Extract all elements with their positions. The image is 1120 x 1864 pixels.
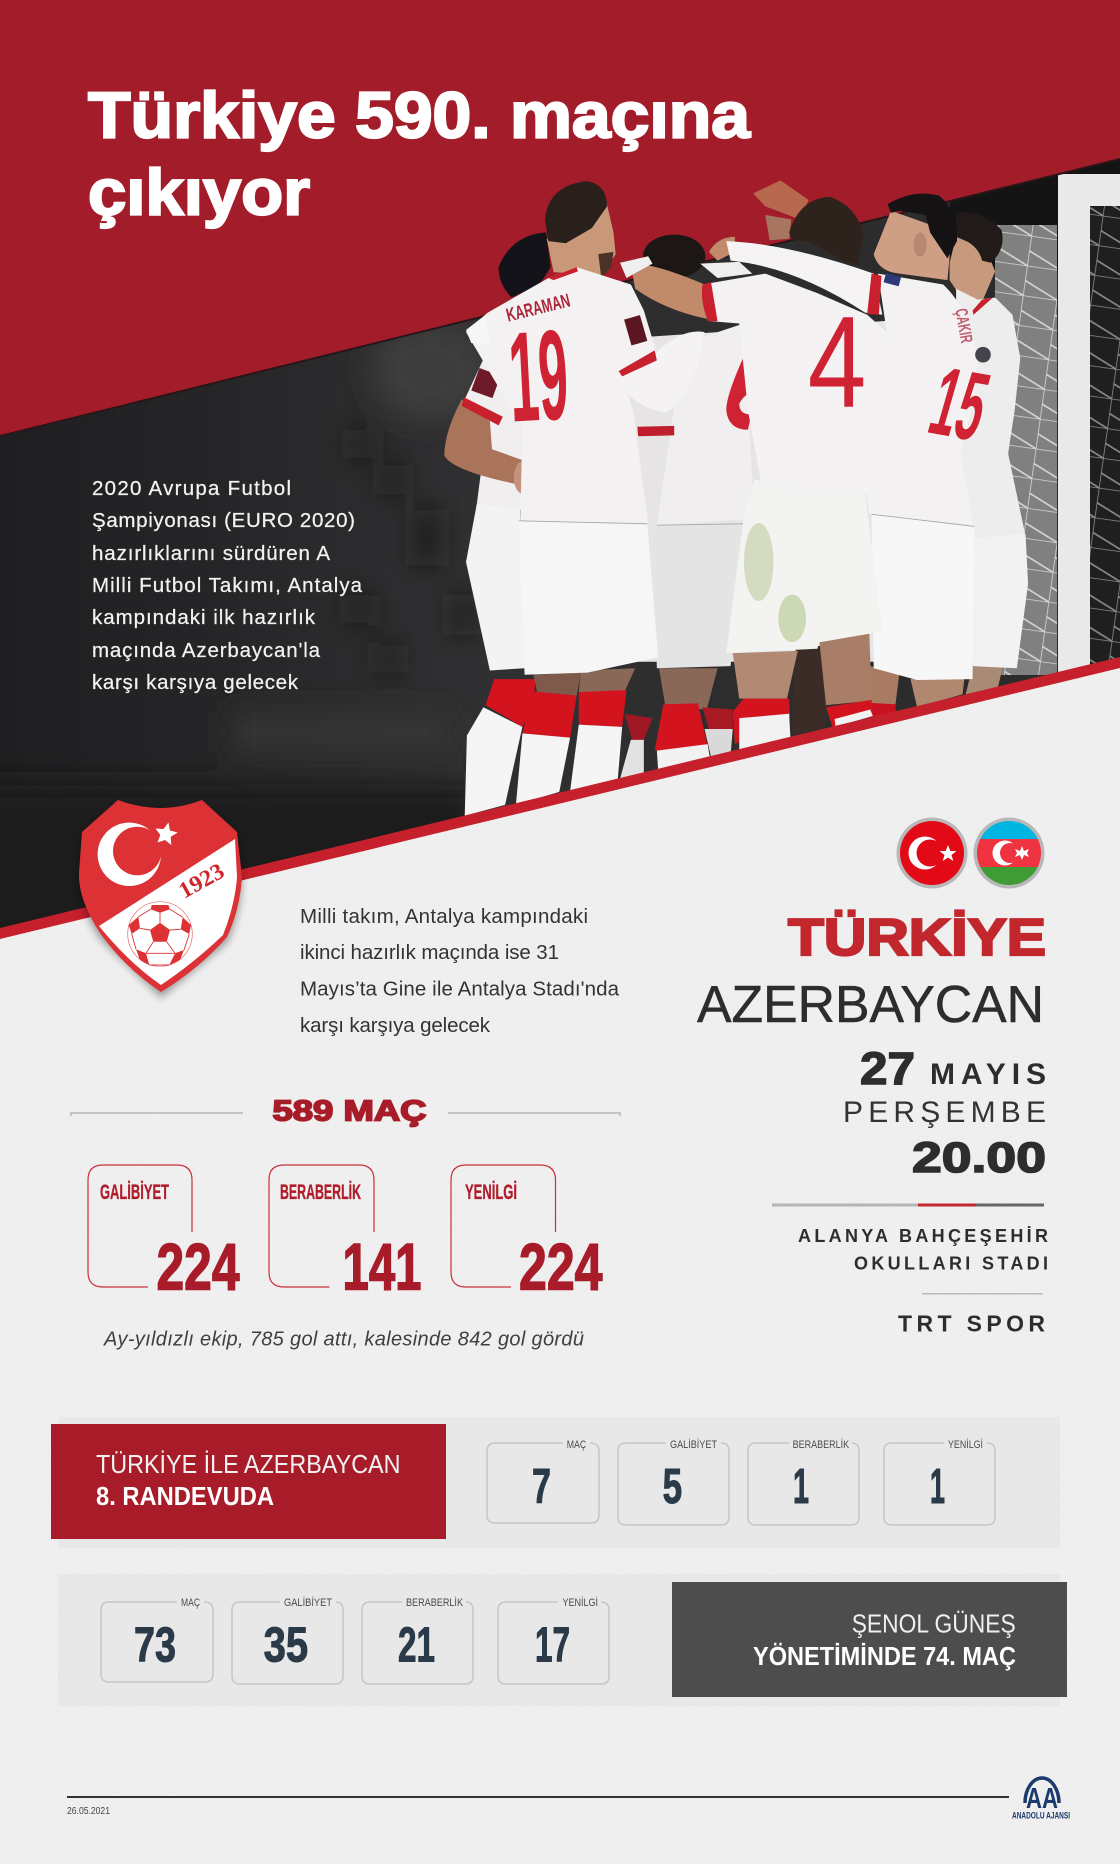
paper texture xyxy=(7,668,1119,938)
red diagonal band and light lower panel xyxy=(0,657,1120,1864)
stat: yenilgi: 224 xyxy=(519,1230,603,1304)
stat numbers: 73 xyxy=(134,1618,176,1672)
stat: yenilgi: YENİLGİ xyxy=(465,1181,517,1204)
player 19: 19 xyxy=(506,304,571,449)
stat labels: GALİBİYET xyxy=(284,1596,332,1609)
stat: galibiyet: GALİBİYET xyxy=(100,1181,169,1204)
title: Türkiye 590. maçına xyxy=(88,78,751,152)
player 15 head and arm xyxy=(726,194,957,315)
stat numbers xyxy=(532,1460,945,1514)
player left xyxy=(444,232,551,816)
title: çıkıyor xyxy=(88,156,310,228)
logo: Anadolu Ajansı: ANADOLU AJANSI xyxy=(1012,1810,1070,1822)
panel: Türkiye - Azerbaycan head to head xyxy=(51,1417,1060,1548)
top red panel xyxy=(0,0,1120,436)
stat: beraberlik: 141 xyxy=(342,1230,422,1304)
intro text: maçında Azerbaycan'la xyxy=(92,639,321,662)
match details: TÜRKİYE xyxy=(788,909,1046,967)
player centre back xyxy=(620,235,869,779)
intro text: Şampiyonası (EURO 2020) xyxy=(92,509,355,532)
player 4: 4 xyxy=(808,289,866,435)
match details: MAYIS xyxy=(930,1058,1046,1091)
logo: Anadolu Ajansı xyxy=(1012,1778,1070,1822)
intro text: karşı karşıya gelecek xyxy=(92,671,299,694)
intro text: hazırlıklarını sürdüren A xyxy=(92,542,330,565)
stat labels: GALİBİYET xyxy=(670,1438,717,1451)
stat numbers: 17 xyxy=(535,1618,570,1672)
match details: TRT SPOR xyxy=(898,1310,1045,1336)
stat boxes xyxy=(101,1602,609,1684)
football in crest xyxy=(128,902,192,966)
callout: 8. randevuda xyxy=(51,1424,446,1539)
goal post and net xyxy=(995,174,1120,675)
goals note: Ay-yıldızlı ekip, 785 gol attı, kalesinde 842 gol gördü xyxy=(103,1328,584,1350)
callout: Şenol Güneş: ŞENOL GÜNEŞ xyxy=(852,1608,1016,1638)
second paragraph: ikinci hazırlık maçında ise 31 xyxy=(300,941,559,964)
callout: Şenol Güneş xyxy=(672,1582,1067,1697)
stat labels: MAÇ xyxy=(567,1439,586,1451)
stat labels: BERABERLİK xyxy=(793,1438,850,1451)
player 15 body xyxy=(865,274,1000,719)
callout: Şenol Güneş: YÖNETİMİNDE 74. MAÇ xyxy=(753,1641,1016,1671)
logo: Anadolu Ajansı: AA xyxy=(1026,1783,1058,1815)
intro text: Milli Futbol Takımı, Antalya xyxy=(92,574,363,597)
stat numbers: 21 xyxy=(398,1618,435,1672)
flags xyxy=(896,818,1044,888)
second paragraph: Mayıs’ta Gine ile Antalya Stadı'nda xyxy=(300,978,620,1000)
callout: 8. randevuda: 8. RANDEVUDA xyxy=(96,1481,274,1511)
stat numbers: 1 xyxy=(793,1460,809,1514)
crest: Turkish Football Federation xyxy=(79,800,242,998)
second paragraph: karşı karşıya gelecek xyxy=(300,1014,491,1037)
match details xyxy=(697,909,1048,1336)
player 19 xyxy=(466,181,705,805)
flag: Turkey xyxy=(896,818,968,888)
player 15 body: ÇAKIR xyxy=(951,307,977,345)
panel: Şenol Güneş record xyxy=(58,1574,1067,1706)
stat: galibiyet: 224 xyxy=(156,1230,240,1304)
flag: Azerbaijan xyxy=(974,818,1044,888)
stat labels xyxy=(181,1596,598,1609)
stat numbers: 7 xyxy=(532,1460,551,1514)
match details: OKULLARI STADI xyxy=(854,1254,1048,1274)
stat numbers: 1 xyxy=(930,1460,945,1514)
intro text: kampındaki ilk hazırlık xyxy=(92,606,316,629)
stat labels: MAÇ xyxy=(181,1597,200,1609)
second paragraph: Milli takım, Antalya kampındaki xyxy=(300,905,588,928)
title xyxy=(88,78,751,228)
crest: Turkish Football Federation: 1923 xyxy=(174,858,228,903)
match details: ALANYA BAHÇEŞEHİR xyxy=(798,1226,1048,1246)
stat labels: BERABERLİK xyxy=(406,1596,464,1609)
stat boxes xyxy=(487,1443,995,1525)
heading: 589 maç xyxy=(71,1096,620,1128)
stat labels: YENİLGİ xyxy=(562,1596,598,1609)
player far right xyxy=(950,212,1028,694)
stat numbers: 35 xyxy=(264,1618,308,1672)
intro text: 2020 Avrupa Futbol xyxy=(92,477,291,500)
stat numbers: 5 xyxy=(663,1460,682,1514)
team photo illustration: footballers huddle xyxy=(444,180,1028,816)
match details: 20.00 xyxy=(912,1134,1046,1182)
player 15 body: 15 xyxy=(919,346,1000,461)
callout: 8. randevuda: TÜRKİYE İLE AZERBAYCAN xyxy=(96,1449,400,1479)
footer rule and date: 26.05.2021 xyxy=(67,1806,110,1817)
match details: AZERBAYCAN xyxy=(697,976,1044,1034)
player 19: KARAMAN xyxy=(504,290,572,327)
stat: beraberlik xyxy=(269,1165,422,1304)
stat labels xyxy=(567,1438,983,1451)
stat: galibiyet xyxy=(88,1165,240,1304)
player 4 xyxy=(620,180,887,751)
heading: 589 maç: 589 MAÇ xyxy=(272,1096,427,1128)
second paragraph xyxy=(300,905,620,1037)
intro text xyxy=(92,477,363,694)
match details: 27 xyxy=(860,1043,915,1094)
stat labels: YENİLGİ xyxy=(948,1438,983,1451)
stat numbers xyxy=(134,1618,570,1672)
stat: yenilgi xyxy=(451,1165,603,1304)
stat: beraberlik: BERABERLİK xyxy=(280,1181,361,1204)
dark stadium background xyxy=(0,150,1120,985)
match details: PERŞEMBE xyxy=(843,1096,1046,1129)
